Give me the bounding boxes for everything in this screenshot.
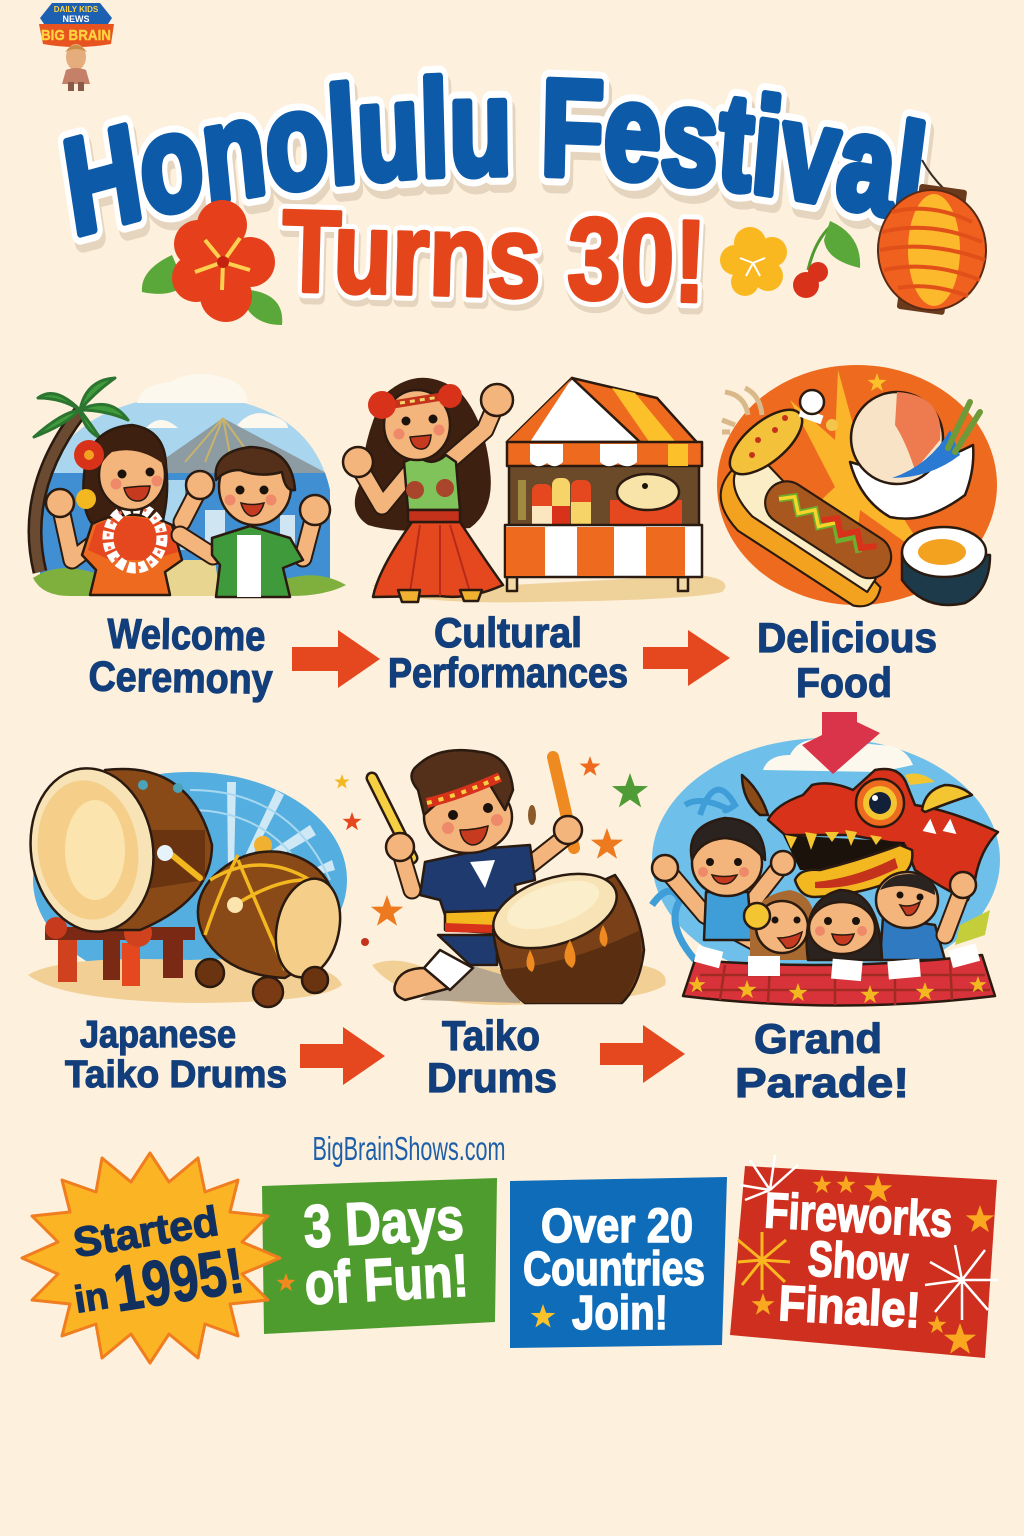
- badge text: [523, 1200, 705, 1340]
- icon: paper lantern: [878, 160, 986, 315]
- small star: [276, 1273, 296, 1291]
- icon: leaf and red berries: [793, 221, 860, 298]
- badge text: Fireworks: [763, 1182, 954, 1248]
- panel: Grand Parade illustration: [652, 738, 1000, 1006]
- ground shadow: [372, 575, 726, 602]
- badge text: Finale!: [777, 1275, 922, 1338]
- label: Cultural Performances: Performances: [388, 649, 628, 696]
- arrow 2: [643, 630, 730, 686]
- ground grass: [33, 568, 346, 596]
- logo: Daily Kids News with Big Brain: DAILY KIDS: [54, 5, 99, 14]
- sun rays: [190, 782, 335, 885]
- label: Taiko Drums: Taiko: [442, 1012, 540, 1059]
- panel: Japanese Taiko Drums illustration: [20, 760, 349, 1007]
- steam marks: [722, 388, 762, 432]
- badge: Fireworks Show Finale: [730, 1155, 998, 1358]
- badge text: [758, 1182, 954, 1340]
- label: Taiko Drums: [427, 1012, 557, 1101]
- small drum on wheels: [157, 836, 349, 1007]
- logo: Daily Kids News with Big Brain: NEWS: [62, 14, 90, 24]
- sand: [372, 961, 666, 1005]
- badge text: [300, 1185, 470, 1317]
- sushi roll: [902, 527, 990, 605]
- panel: Taiko drummer boy illustration: [334, 750, 666, 1005]
- badge text: Show: [807, 1231, 909, 1292]
- badge text: 3 Days: [302, 1185, 465, 1260]
- boy in green shirt: [180, 447, 330, 597]
- label: Japanese Taiko Drums: Taiko Drums: [65, 1054, 287, 1096]
- drum: [484, 860, 644, 1003]
- title: Honolulu Festival: Honolulu Festival: [74, 76, 934, 253]
- shave ice bowl: [850, 392, 980, 519]
- title: Turns 30!: Turns 30!: [282, 192, 710, 333]
- parade float with bunting: [683, 943, 995, 1006]
- sky dome with clouds: [40, 374, 330, 578]
- title: Turns 30!: Turns 30!: [280, 186, 708, 327]
- title: Turns 30!: Turns 30!: [280, 186, 708, 327]
- panel: Delicious Food illustration: [705, 365, 997, 614]
- website link text: BigBrainShows.com: [312, 1130, 506, 1167]
- badge text: Started: [70, 1197, 222, 1266]
- arrow 4: [300, 1027, 385, 1085]
- boy: [372, 750, 582, 1000]
- badge text: in: [72, 1275, 112, 1322]
- logo: Daily Kids News with Big Brain: [39, 3, 114, 91]
- badge text: 1995!: [109, 1234, 248, 1325]
- label: Japanese Taiko Drums: [65, 1014, 287, 1096]
- title: Honolulu Festival: Honolulu Festival: [58, 66, 932, 245]
- star: [868, 373, 886, 391]
- hula dancer: [343, 378, 513, 602]
- decorative stars: [334, 756, 648, 946]
- label: Welcome Ceremony: Welcome: [107, 610, 266, 659]
- badge text: of Fun!: [303, 1242, 470, 1317]
- logo: Daily Kids News with Big Brain: BIG BRAIN: [41, 27, 111, 44]
- mountain and buildings: [30, 418, 340, 578]
- pizza and drumstick: [719, 390, 838, 486]
- red dragon: [742, 769, 998, 900]
- girl with lei: [46, 425, 182, 595]
- label: Welcome Ceremony: Ceremony: [88, 652, 274, 703]
- label: Delicious Food: [757, 614, 937, 706]
- star: [531, 1304, 555, 1328]
- arrow 1: [292, 630, 380, 688]
- food stall: [505, 378, 702, 591]
- panel: Cultural Performances illustration: [343, 378, 726, 602]
- label: Delicious Food: Delicious: [757, 614, 937, 661]
- crowd: [652, 818, 990, 960]
- label: Delicious Food: Food: [796, 659, 892, 706]
- badge text: [62, 1194, 248, 1332]
- label: Grand Parade!: Parade!: [735, 1059, 909, 1106]
- label: Japanese Taiko Drums: Japanese: [80, 1014, 236, 1056]
- label: Grand Parade!: Grand: [754, 1015, 882, 1062]
- label: Cultural Performances: [388, 609, 628, 696]
- label: Cultural Performances: Cultural: [434, 609, 582, 656]
- badge: Started in 1995 starburst: [22, 1153, 280, 1363]
- title: Honolulu Festival: Honolulu Festival: [63, 72, 926, 238]
- fireworks: [738, 1155, 998, 1354]
- palm tree: [34, 378, 128, 572]
- sand: [28, 959, 342, 1003]
- label: Taiko Drums: Drums: [427, 1054, 557, 1101]
- orange circle with rays: [717, 365, 997, 605]
- icon: red hibiscus with leaves: [142, 200, 282, 325]
- arrow 3: pointing down: [802, 712, 880, 774]
- big drum with stand: [20, 760, 212, 986]
- icon: yellow flower: [720, 227, 787, 296]
- label: Grand Parade!: [735, 1015, 909, 1106]
- hot dog: [705, 448, 906, 614]
- badge text: Countries: [523, 1243, 705, 1296]
- label: Welcome Ceremony: [88, 609, 274, 703]
- arrow 5: [600, 1025, 685, 1083]
- badge: 3 Days of Fun: [262, 1178, 497, 1334]
- badge text: Join!: [572, 1287, 668, 1340]
- panel: Welcome Ceremony illustration: [30, 374, 346, 597]
- blue dome and clouds: [652, 738, 1000, 982]
- badge: Over 20 Countries Join: [510, 1177, 727, 1348]
- blue circle: [33, 772, 347, 988]
- badge text: Over 20: [541, 1200, 693, 1253]
